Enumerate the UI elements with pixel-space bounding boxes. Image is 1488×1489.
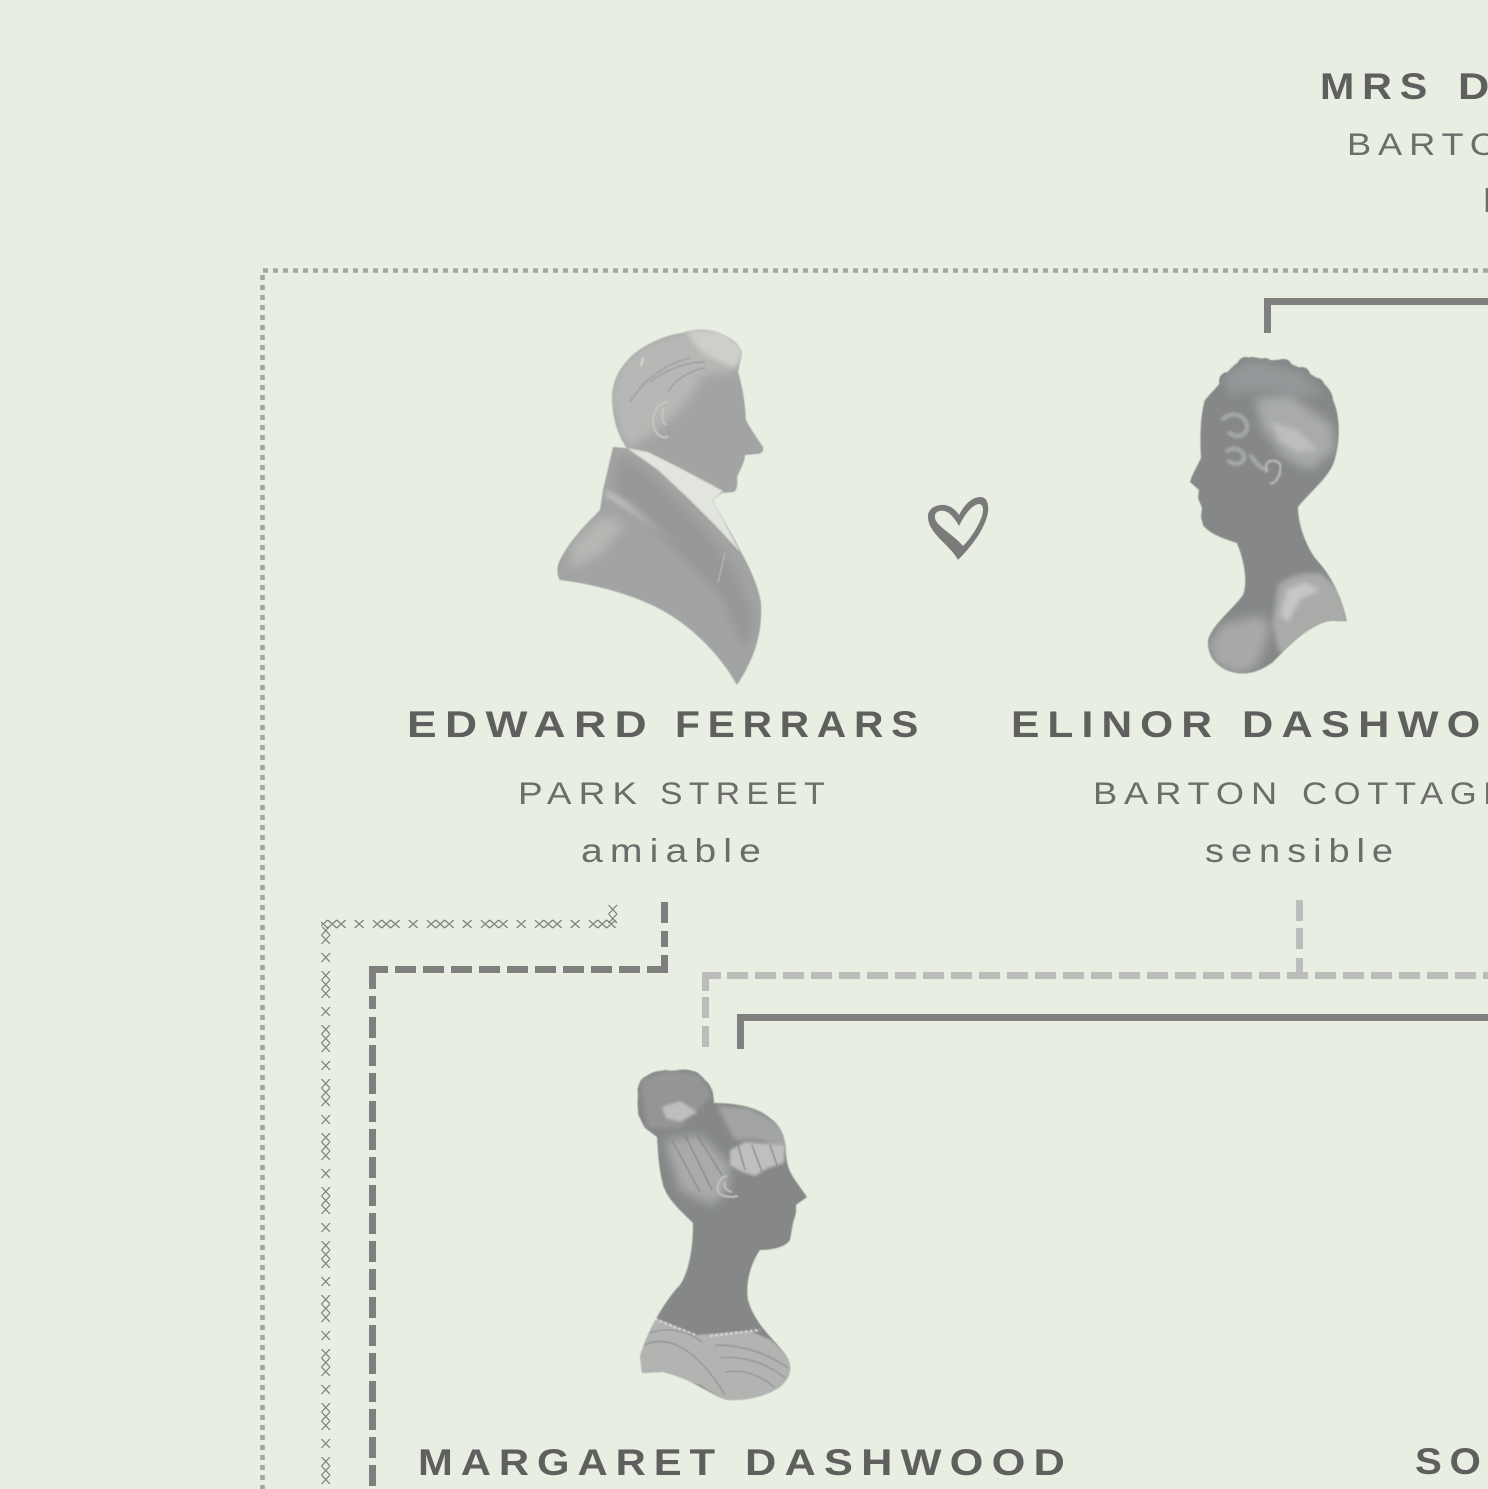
- elinor dashwood text block: BARTON: [1093, 775, 1284, 811]
- portrait: elinor dashwood silhouette: [1190, 356, 1348, 674]
- portrait: margaret dashwood silhouette: [637, 1069, 808, 1401]
- cross-stitch connector: edward to margaret: [321, 905, 617, 1489]
- elinor dashwood text block: ELINOR: [1011, 704, 1220, 745]
- edward ferrars text block: [407, 704, 926, 869]
- elinor dashwood text block: [1011, 704, 1488, 869]
- edward ferrars text block: amiable: [581, 832, 768, 869]
- edward ferrars text block: PARK: [518, 775, 644, 811]
- dotted family frame: [262, 270, 1488, 1489]
- mrs dashwood text block: [1320, 66, 1488, 219]
- edward ferrars text block: FERRARS: [675, 704, 926, 745]
- dashed connector: elinor to margaret: [706, 900, 1488, 1047]
- mrs dashwood text block: MRS: [1320, 66, 1435, 107]
- portrait: edward ferrars silhouette: [550, 325, 770, 690]
- edward ferrars text block: STREET: [660, 775, 831, 811]
- solid connector: mrs dashwood to margaret: [740, 1018, 1488, 1049]
- solid connector: mrs dashwood to elinor: [1268, 302, 1488, 333]
- dashed connector: edward to margaret: [372, 902, 664, 1489]
- edward ferrars text block: EDWARD: [407, 704, 655, 745]
- margaret dashwood name: [418, 1442, 1073, 1483]
- elinor dashwood text block: sensible: [1205, 832, 1400, 869]
- icon: heart: [928, 497, 988, 560]
- margaret dashwood name: MARGARET: [418, 1442, 723, 1483]
- margaret dashwood name: DASHWOOD: [745, 1442, 1073, 1483]
